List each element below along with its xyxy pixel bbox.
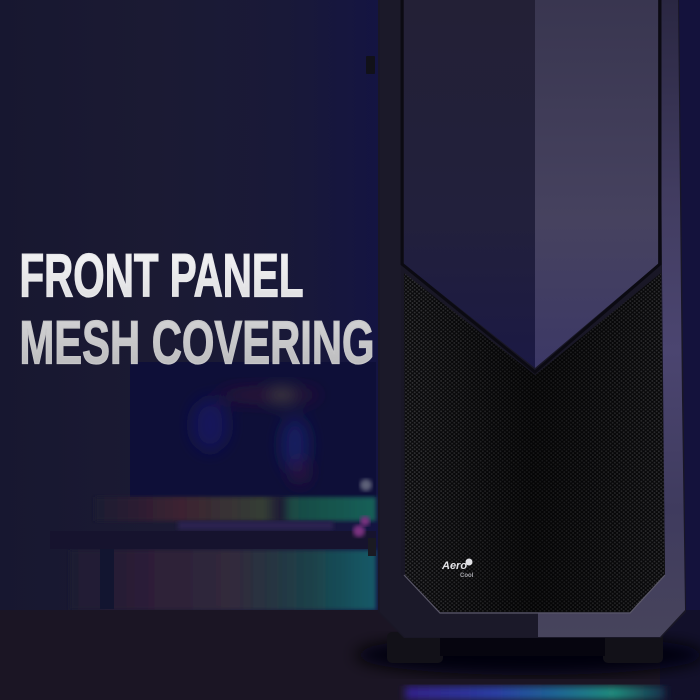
front panel upper right [535,0,658,368]
black panel outline [402,0,660,372]
title line 2: MESH COVERING [20,308,374,376]
mesh frame highlight [404,575,665,613]
Aerocool logo: Cool [460,573,474,579]
case feet [387,632,663,663]
right side band [538,0,685,637]
mesh shading [404,273,665,612]
monitor on desk [130,362,376,521]
title line 1: FRONT PANEL [20,242,304,310]
Aerocool logo: Aero [441,560,467,572]
PC case [366,0,686,663]
case body [378,0,686,638]
front mesh covering [404,273,665,612]
floor / table surface [0,610,700,700]
desk with colored wall glow [50,479,376,610]
Aerocool logo [441,558,474,579]
side switches [366,56,376,556]
left side band [380,0,538,637]
title [20,242,374,376]
front panel upper left [404,0,535,368]
